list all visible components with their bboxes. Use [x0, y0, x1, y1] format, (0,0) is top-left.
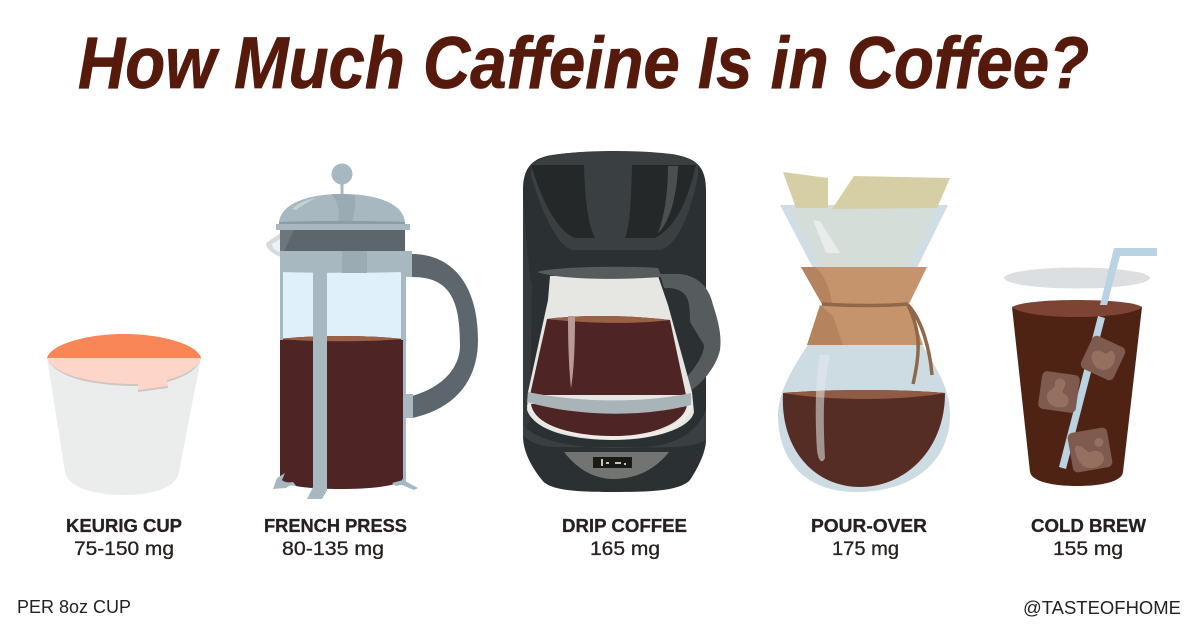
icon: Keurig cup — [47, 334, 201, 495]
handle — [412, 254, 478, 418]
icon: pour-over — [778, 172, 950, 492]
label: French press: 80-135 mg — [282, 538, 384, 560]
icon: cold brew — [1004, 248, 1157, 486]
label: drip coffee — [562, 515, 687, 560]
label: cold brew: COLD BREW — [1031, 515, 1147, 536]
icon: French press — [266, 164, 478, 499]
label: Keurig cup: 75-150 mg — [74, 538, 174, 560]
coffee — [783, 390, 945, 487]
glass highlight — [816, 355, 830, 461]
funnel — [780, 205, 948, 268]
dark band — [280, 230, 405, 251]
collar — [801, 267, 927, 345]
label: cold brew: 155 mg — [1053, 538, 1123, 560]
label: Keurig cup — [66, 515, 182, 560]
ice cubes — [1079, 334, 1127, 382]
cup — [1012, 307, 1142, 486]
label: cold brew — [1031, 515, 1147, 560]
label: drip coffee: DRIP COFFEE — [562, 515, 687, 536]
footnote: per 8oz cup: PER 8oz CUP — [17, 596, 131, 617]
coffee — [280, 336, 403, 489]
label: pour-over: 175 mg — [832, 538, 899, 560]
label: drip coffee: 165 mg — [590, 538, 660, 560]
tie — [822, 304, 932, 384]
title: How Much Caffeine Is in Coffee? — [78, 23, 1089, 104]
lid dome — [340, 182, 344, 196]
coffee — [530, 316, 686, 395]
label: pour-over: POUR-OVER — [811, 515, 927, 536]
globe — [778, 343, 950, 492]
silver band — [280, 251, 412, 277]
control panel — [564, 452, 669, 479]
carafe handle — [660, 274, 721, 392]
filter paper — [783, 172, 828, 208]
frame — [280, 272, 283, 340]
credit: Taste of Home handle: @TASTEOFHOME — [1023, 597, 1181, 618]
lid — [1004, 268, 1150, 288]
spout — [266, 232, 284, 258]
glass — [283, 272, 401, 340]
label: Keurig cup: KEURIG CUP — [66, 515, 182, 536]
carafe lid — [537, 267, 662, 279]
label: French press: FRENCH PRESS — [264, 515, 407, 536]
carafe glass — [527, 276, 694, 440]
carafe band — [527, 392, 691, 414]
label: French press — [264, 515, 407, 560]
label: pour-over — [811, 515, 927, 560]
body — [523, 151, 706, 492]
icon: drip coffee maker — [523, 151, 721, 492]
straw — [1100, 248, 1157, 305]
highlight — [568, 316, 575, 388]
rim — [276, 224, 410, 230]
